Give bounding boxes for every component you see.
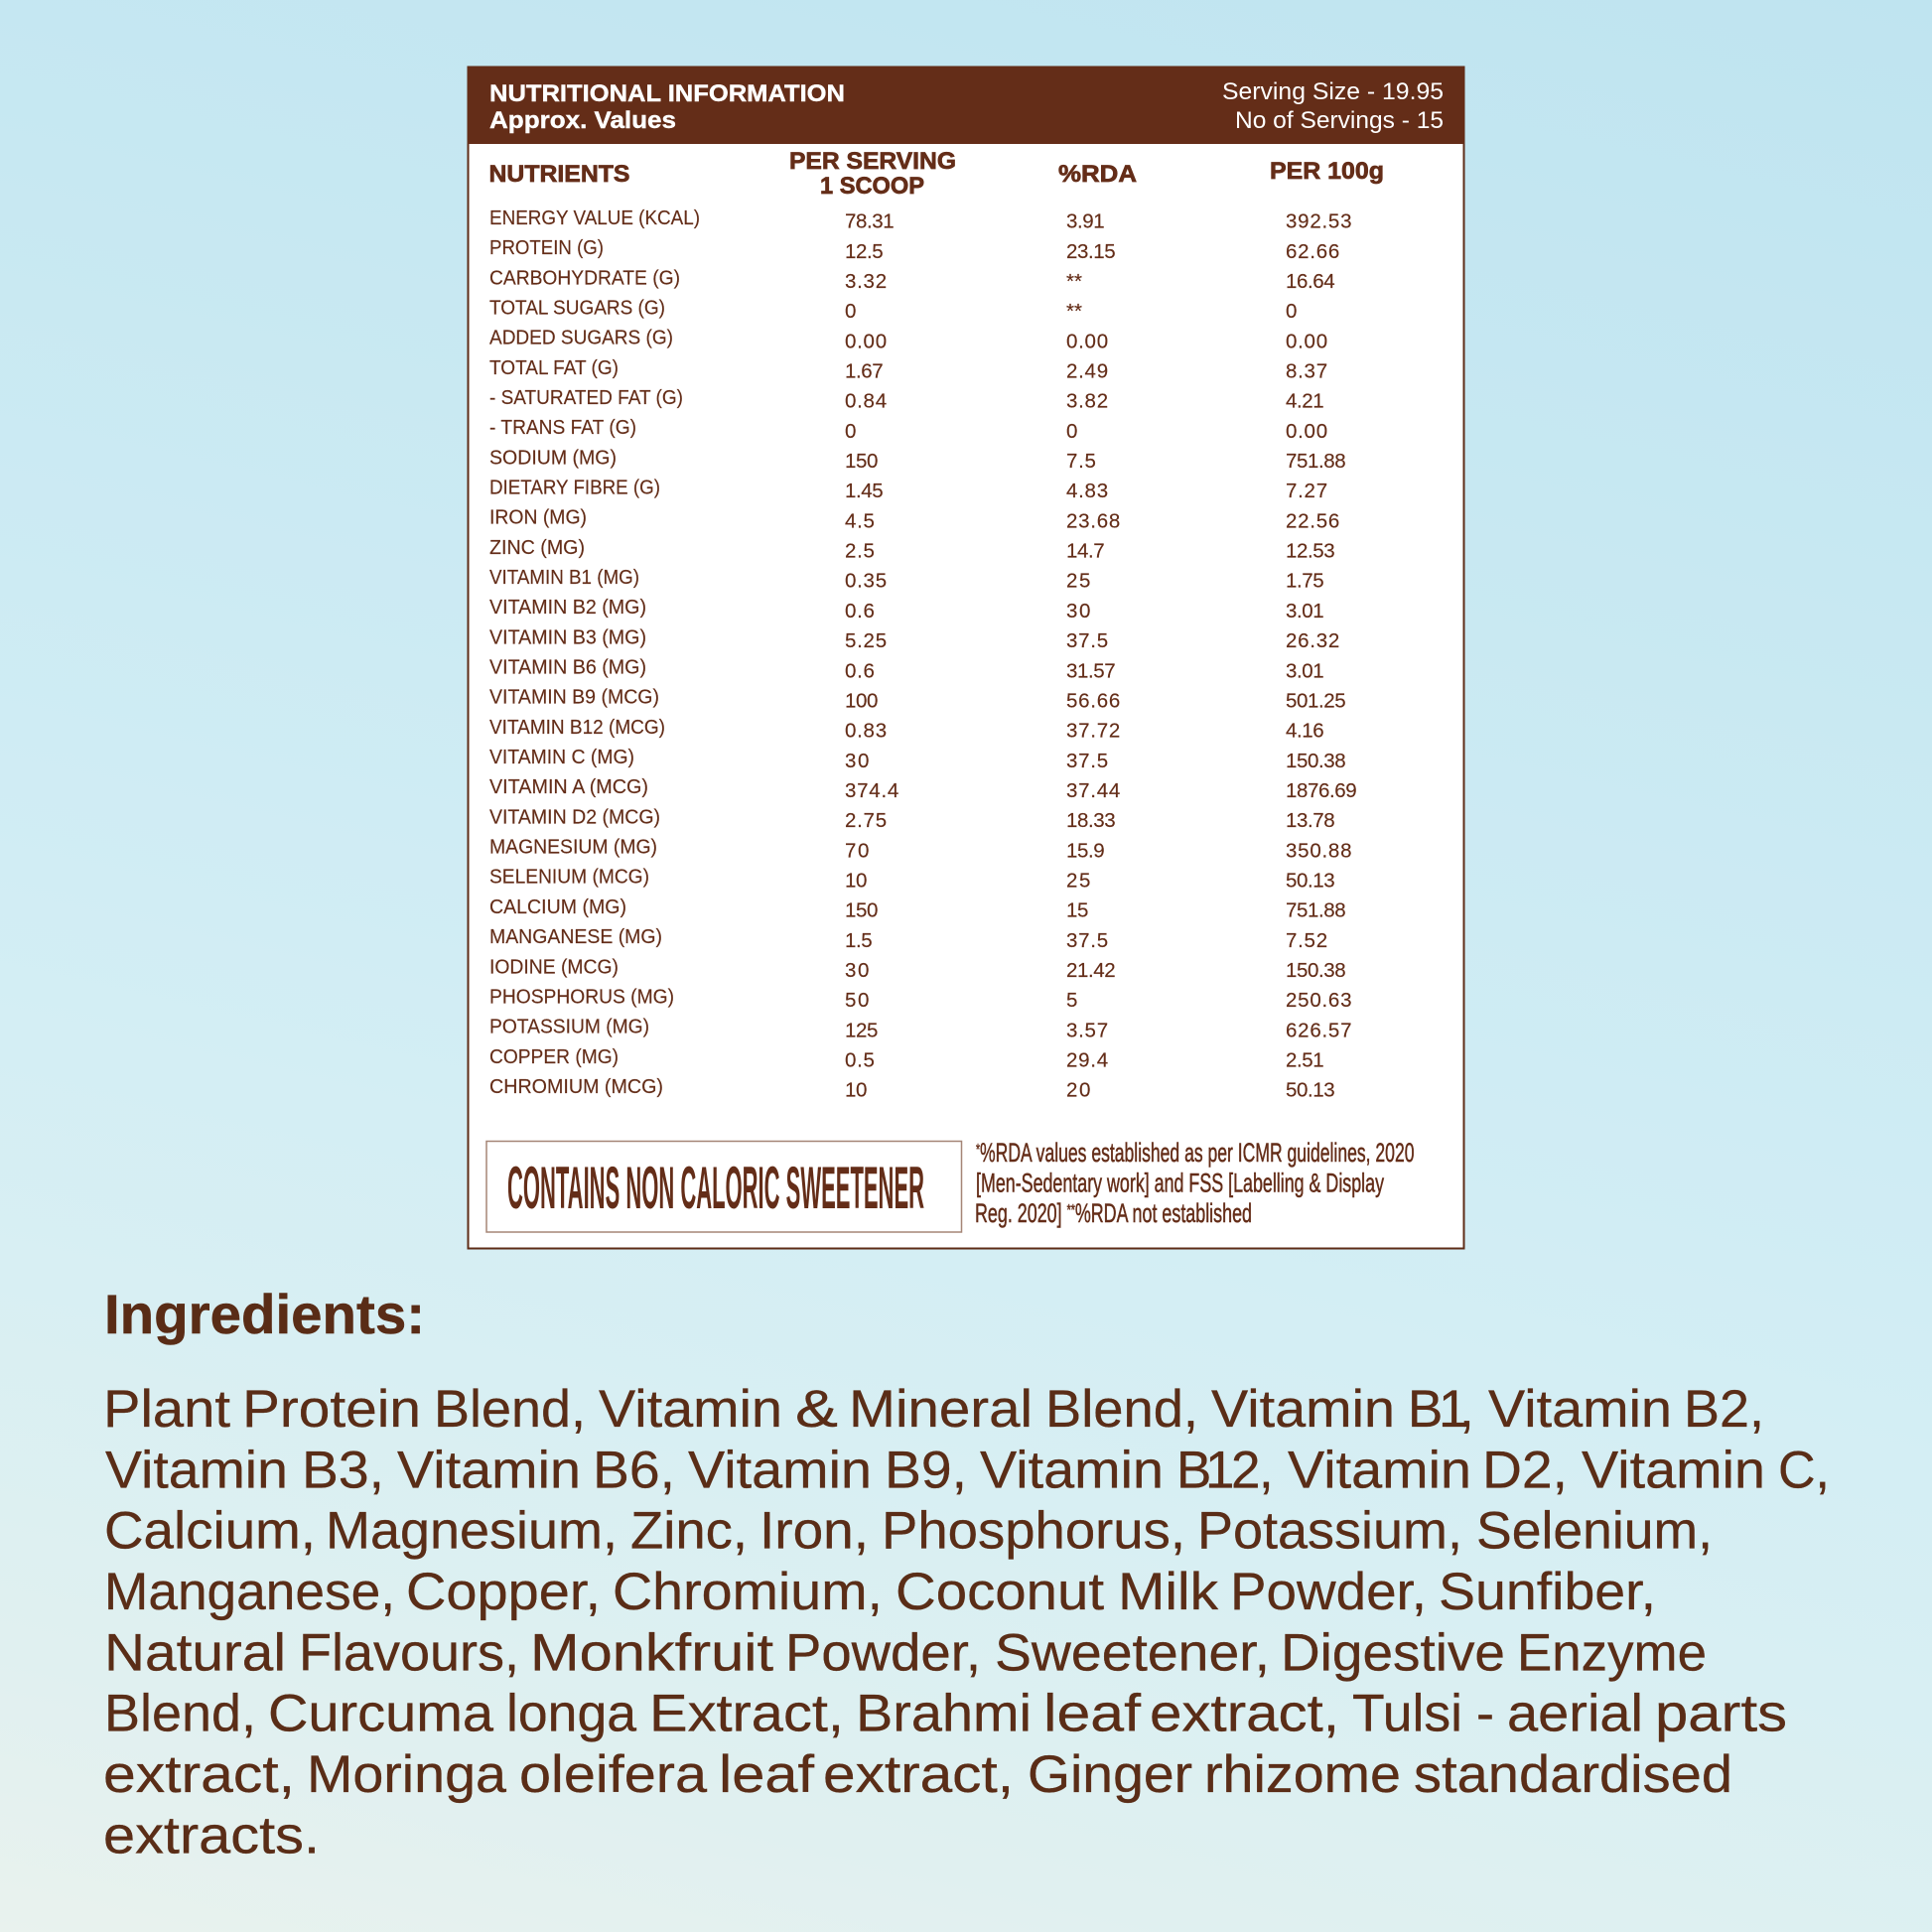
row: potassium: 626.57 xyxy=(1286,1019,1352,1041)
row: iodine: 21.42 xyxy=(1066,959,1115,982)
row: iodine: 30 xyxy=(845,959,869,982)
row: vitamin D2: 2.75 xyxy=(845,809,887,832)
text block: ingredients list: parts xyxy=(1655,1685,1787,1743)
row: energy value: ENERGY VALUE (KCAL) xyxy=(489,207,700,229)
row: total fat: 2.49 xyxy=(1066,360,1108,383)
table header band xyxy=(468,67,1464,144)
column heading: percent RDA: %RDA xyxy=(1058,161,1137,188)
text block: ingredients list: Milk xyxy=(1118,1563,1219,1621)
text block: ingredients list: B3, xyxy=(302,1441,384,1499)
row: vitamin B9: 100 xyxy=(845,689,878,712)
row: magnesium: 15.9 xyxy=(1066,839,1104,862)
row: total fat: 8.37 xyxy=(1286,360,1327,383)
row: vitamin A: 37.44 xyxy=(1066,779,1120,802)
row: zinc xyxy=(489,536,1334,563)
text block: ingredients list: Digestive xyxy=(1281,1623,1505,1682)
row: dietary fibre xyxy=(489,477,1327,502)
text block: ingredients list: Moringa xyxy=(307,1745,507,1804)
row: total sugars: TOTAL SUGARS (G) xyxy=(489,296,665,320)
row: vitamin C xyxy=(489,746,1345,772)
row: chromium: 20 xyxy=(1066,1079,1090,1102)
row: trans fat: 0.00 xyxy=(1286,420,1327,443)
row: added sugars: ADDED SUGARS (G) xyxy=(489,327,673,349)
footnote: %RDA not established xyxy=(1075,1198,1252,1228)
row: added sugars: 0.00 xyxy=(1066,330,1108,352)
row: protein: 23.15 xyxy=(1066,240,1115,263)
text block: ingredients list: Zinc, xyxy=(630,1502,748,1561)
row: magnesium: 350.88 xyxy=(1286,839,1352,862)
text block: ingredients list: Vitamin xyxy=(980,1441,1164,1499)
text block: ingredients list: leaf xyxy=(1043,1685,1141,1743)
row: copper: COPPER (MG) xyxy=(489,1045,619,1068)
text block: ingredients list: Iron, xyxy=(759,1502,869,1561)
text block: ingredients list: Brahmi xyxy=(856,1685,1032,1743)
footnote: %RDA values established as per ICMR guidelines, 2020 xyxy=(980,1138,1414,1168)
text block: ingredients list: Ginger xyxy=(1028,1745,1192,1804)
row: vitamin B9: VITAMIN B9 (MCG) xyxy=(489,686,659,709)
row: vitamin B12 xyxy=(489,716,1323,743)
text block: ingredients list: Copper, xyxy=(406,1563,601,1621)
callout: contains non caloric sweetener xyxy=(486,1142,961,1232)
row: potassium xyxy=(489,1016,1352,1041)
footnote: [Men-Sedentary work] and FSS [Labelling & Display xyxy=(976,1168,1384,1197)
row: total sugars: 0 xyxy=(845,300,856,323)
row: vitamin B2: 0.6 xyxy=(845,600,875,622)
row: vitamin B3: 26.32 xyxy=(1286,629,1339,652)
text block: ingredients list: Phosphorus, xyxy=(882,1502,1185,1561)
subheading: approx values: Approx. Values xyxy=(489,107,676,134)
row: sodium: 751.88 xyxy=(1286,450,1345,473)
row: vitamin B2 xyxy=(489,596,1323,622)
row: magnesium: 70 xyxy=(845,839,869,862)
text block: ingredients list: Flavours, xyxy=(299,1623,519,1682)
text block: ingredients list: Vitamin xyxy=(1488,1380,1672,1439)
row: carbohydrate xyxy=(489,266,1334,293)
footnote: * xyxy=(976,1142,980,1159)
row: vitamin B1 xyxy=(489,566,1323,593)
row: dietary fibre: 1.45 xyxy=(845,480,883,502)
row: vitamin B2: VITAMIN B2 (MG) xyxy=(489,596,646,619)
text block: ingredients list: rhizome xyxy=(1204,1745,1401,1804)
text block: ingredients list: Monkfruit xyxy=(530,1623,773,1682)
row: protein xyxy=(489,236,1339,263)
row: protein: PROTEIN (G) xyxy=(489,236,604,259)
text block: ingredients list: Vitamin xyxy=(688,1441,872,1499)
row: iron: IRON (MG) xyxy=(489,506,587,529)
row: phosphorus: PHOSPHORUS (MG) xyxy=(489,985,674,1008)
row: energy value: 3.91 xyxy=(1066,210,1104,233)
row: sodium xyxy=(489,446,1345,473)
row: iodine: IODINE (MCG) xyxy=(489,955,619,978)
row: vitamin B6: 0.6 xyxy=(845,659,875,682)
row: vitamin B6: 3.01 xyxy=(1286,659,1323,682)
row: carbohydrate: 3.32 xyxy=(845,270,887,293)
text block: ingredients list: Sunfiber, xyxy=(1439,1563,1656,1621)
text block: ingredients list: Vitamin xyxy=(1582,1441,1765,1499)
text block: ingredients list: - xyxy=(1476,1685,1494,1743)
row: calcium: 751.88 xyxy=(1286,899,1345,922)
text block: ingredients list xyxy=(103,1380,1830,1864)
row: selenium xyxy=(489,866,1334,892)
row: vitamin B9: 501.25 xyxy=(1286,689,1345,712)
row: vitamin B2: 30 xyxy=(1066,600,1090,622)
row: trans fat: 0 xyxy=(1066,420,1077,443)
text block: ingredients list: B2, xyxy=(1684,1380,1764,1439)
row: carbohydrate: CARBOHYDRATE (G) xyxy=(489,266,680,289)
row: vitamin B12: 4.16 xyxy=(1286,720,1323,743)
text block: ingredients list: oleifera xyxy=(519,1745,708,1804)
row: vitamin B6: 31.57 xyxy=(1066,659,1115,682)
row: vitamin A: VITAMIN A (MCG) xyxy=(489,775,648,798)
row: vitamin B2: 3.01 xyxy=(1286,600,1323,622)
row: copper: 29.4 xyxy=(1066,1048,1108,1072)
footnote: ** xyxy=(1067,1202,1075,1219)
row: manganese: 7.52 xyxy=(1286,929,1327,952)
panel: nutrition table xyxy=(468,67,1464,1249)
row: manganese: 1.5 xyxy=(845,929,872,952)
row: protein: 12.5 xyxy=(845,240,883,263)
row: manganese: 37.5 xyxy=(1066,929,1108,952)
text block: ingredients list: leaf xyxy=(719,1745,814,1804)
text block: ingredients list: Chromium, xyxy=(613,1563,883,1621)
row: saturated fat: - SATURATED FAT (G) xyxy=(489,386,683,409)
row: manganese xyxy=(489,925,1327,952)
row: sodium: 7.5 xyxy=(1066,450,1096,473)
row: chromium: 50.13 xyxy=(1286,1079,1334,1102)
text block: ingredients list: aerial xyxy=(1507,1685,1643,1743)
text block: ingredients list: Powder, xyxy=(785,1623,981,1682)
row: saturated fat: 0.84 xyxy=(845,390,887,413)
text block: ingredients list: Coconut xyxy=(896,1563,1104,1621)
row: carbohydrate: ** xyxy=(1066,270,1082,293)
row: total fat: 1.67 xyxy=(845,360,883,383)
text block: ingredients list: longa xyxy=(506,1685,637,1743)
text block: ingredients list: Natural xyxy=(104,1623,286,1682)
footnote xyxy=(975,1138,1414,1228)
serving size: Serving Size - 19.95 xyxy=(1222,78,1444,105)
text block: ingredients list: Manganese, xyxy=(104,1563,395,1621)
row: chromium: 10 xyxy=(845,1079,867,1102)
text block: ingredients list: Magnesium, xyxy=(326,1502,618,1561)
row: total sugars xyxy=(489,296,1297,323)
text block: ingredients list: extract, xyxy=(823,1745,1014,1804)
row: magnesium xyxy=(489,836,1352,862)
row: phosphorus: 250.63 xyxy=(1286,989,1352,1012)
row: selenium: 50.13 xyxy=(1286,869,1334,892)
row: total fat xyxy=(489,356,1327,383)
row: protein: 62.66 xyxy=(1286,240,1339,263)
row: iron: 22.56 xyxy=(1286,509,1339,532)
column heading: per serving: PER SERVING xyxy=(789,148,956,175)
number of servings: No of Servings - 15 xyxy=(1235,107,1444,134)
row: magnesium: MAGNESIUM (MG) xyxy=(489,836,657,859)
row: carbohydrate: 16.64 xyxy=(1286,270,1334,293)
row: saturated fat: 4.21 xyxy=(1286,390,1323,413)
row: energy value xyxy=(489,207,1352,233)
row: zinc: 2.5 xyxy=(845,540,875,563)
text block: ingredients list: B9, xyxy=(885,1441,967,1499)
row: vitamin B1: VITAMIN B1 (MG) xyxy=(489,566,639,589)
row: zinc: ZINC (MG) xyxy=(489,536,585,559)
row: dietary fibre: 7.27 xyxy=(1286,480,1327,502)
row: phosphorus: 50 xyxy=(845,989,869,1012)
row: vitamin B6 xyxy=(489,656,1323,682)
row: sodium: SODIUM (MG) xyxy=(489,446,617,469)
row: zinc: 12.53 xyxy=(1286,540,1334,563)
text block: ingredients list: Vitamin xyxy=(599,1380,782,1439)
row: iron xyxy=(489,506,1339,532)
row: vitamin B12: 37.72 xyxy=(1066,720,1120,743)
row: sodium: 150 xyxy=(845,450,878,473)
text block: ingredients list: Plant xyxy=(103,1380,230,1439)
row: calcium: 150 xyxy=(845,899,878,922)
row: added sugars: 0.00 xyxy=(1286,330,1327,352)
row: vitamin D2 xyxy=(489,805,1334,832)
row: calcium: 15 xyxy=(1066,899,1088,922)
text block: ingredients list: Vitamin xyxy=(1211,1380,1395,1439)
text block: ingredients list: Blend, xyxy=(434,1380,586,1439)
row: copper xyxy=(489,1045,1323,1072)
row: vitamin B9 xyxy=(489,686,1345,712)
row: vitamin B9: 56.66 xyxy=(1066,689,1120,712)
row: vitamin B12: 0.83 xyxy=(845,720,887,743)
text block: ingredients list: Vitamin xyxy=(1288,1441,1471,1499)
row: trans fat xyxy=(489,416,1327,443)
row: vitamin A: 1876.69 xyxy=(1286,779,1356,802)
row: vitamin B3: VITAMIN B3 (MG) xyxy=(489,625,646,648)
row: potassium: POTASSIUM (MG) xyxy=(489,1016,649,1038)
column heading: nutrients: NUTRIENTS xyxy=(488,161,629,188)
row: vitamin C: 150.38 xyxy=(1286,750,1345,772)
row: vitamin D2: 13.78 xyxy=(1286,809,1334,832)
text block: ingredients list: Extract, xyxy=(649,1685,844,1743)
row: added sugars xyxy=(489,327,1327,352)
row: vitamin B1: 0.35 xyxy=(845,570,887,593)
text block: ingredients list: C, xyxy=(1778,1441,1830,1499)
row: iron: 4.5 xyxy=(845,509,875,532)
row: zinc: 14.7 xyxy=(1066,540,1104,563)
row: calcium: CALCIUM (MG) xyxy=(489,896,626,918)
row: potassium: 3.57 xyxy=(1066,1019,1108,1041)
row: calcium xyxy=(489,896,1345,922)
row: chromium: CHROMIUM (MCG) xyxy=(489,1075,663,1098)
text block: ingredients list: Mineral xyxy=(849,1380,1033,1439)
row: selenium: 10 xyxy=(845,869,867,892)
row: added sugars: 0.00 xyxy=(845,330,887,352)
row: phosphorus xyxy=(489,985,1352,1012)
text block: ingredients list: Enzyme xyxy=(1517,1623,1707,1682)
row: saturated fat: 3.82 xyxy=(1066,390,1108,413)
row: vitamin B3 xyxy=(489,625,1339,652)
row: energy value: 392.53 xyxy=(1286,210,1352,233)
row: vitamin D2: 18.33 xyxy=(1066,809,1115,832)
row: vitamin B1: 1.75 xyxy=(1286,570,1323,593)
row: chromium xyxy=(489,1075,1334,1102)
text block: ingredients list: extract, xyxy=(103,1745,295,1804)
column heading: per 100g: PER 100g xyxy=(1270,158,1384,185)
text block: ingredients list: Selenium, xyxy=(1476,1502,1713,1561)
text block: ingredients list: Powder, xyxy=(1230,1563,1427,1621)
row: saturated fat xyxy=(489,386,1323,413)
row: phosphorus: 5 xyxy=(1066,989,1077,1012)
row: vitamin B1: 25 xyxy=(1066,570,1090,593)
text block: ingredients list: D2, xyxy=(1482,1441,1568,1499)
row: iodine xyxy=(489,955,1345,982)
row: iron: 23.68 xyxy=(1066,509,1120,532)
text block: ingredients list: Calcium, xyxy=(104,1502,316,1561)
row: copper: 2.51 xyxy=(1286,1048,1323,1072)
text block: ingredients list: Curcuma xyxy=(268,1685,494,1743)
text block: ingredients list: Blend, xyxy=(104,1685,256,1743)
row: selenium: 25 xyxy=(1066,869,1090,892)
column heading: per serving: 1 SCOOP xyxy=(820,173,924,200)
text block: ingredients list: Tulsi xyxy=(1352,1685,1462,1743)
text block: ingredients list: B6, xyxy=(593,1441,675,1499)
row: energy value: 78.31 xyxy=(845,210,894,233)
row: potassium: 125 xyxy=(845,1019,878,1041)
heading: nutritional information: NUTRITIONAL INFORMATION xyxy=(489,80,845,107)
text block: ingredients list: Vitamin xyxy=(105,1441,288,1499)
row: iodine: 150.38 xyxy=(1286,959,1345,982)
row: total fat: TOTAL FAT (G) xyxy=(489,356,619,379)
row: vitamin A: 374.4 xyxy=(845,779,898,802)
row: vitamin C: VITAMIN C (MG) xyxy=(489,746,634,768)
row: vitamin A xyxy=(489,775,1356,802)
row: manganese: MANGANESE (MG) xyxy=(489,925,662,948)
row: selenium: SELENIUM (MCG) xyxy=(489,866,649,889)
row: trans fat: 0 xyxy=(845,420,856,443)
row: trans fat: - TRANS FAT (G) xyxy=(489,416,636,439)
text block: ingredients list: Blend, xyxy=(1045,1380,1198,1439)
row: vitamin B12: VITAMIN B12 (MCG) xyxy=(489,716,665,739)
row: total sugars: 0 xyxy=(1286,300,1297,323)
text block: ingredients list: extract, xyxy=(1150,1685,1339,1743)
text block: ingredients list: Vitamin xyxy=(397,1441,581,1499)
text block: ingredients list: B1, xyxy=(1408,1380,1474,1439)
text block: ingredients list: Sweetener, xyxy=(995,1623,1270,1682)
text block: ingredients list: Protein xyxy=(242,1380,421,1439)
heading: ingredients: Ingredients: xyxy=(104,1283,425,1345)
text block: ingredients list: B12, xyxy=(1176,1441,1274,1499)
row: vitamin B3: 37.5 xyxy=(1066,629,1108,652)
row: dietary fibre: 4.83 xyxy=(1066,480,1108,502)
column heading: per serving xyxy=(789,148,956,200)
text block: ingredients list: extracts. xyxy=(103,1806,320,1864)
text block: ingredients list: Potassium, xyxy=(1197,1502,1462,1561)
row: copper: 0.5 xyxy=(845,1048,875,1072)
text block: ingredients list: & xyxy=(795,1380,838,1439)
row: vitamin B6: VITAMIN B6 (MG) xyxy=(489,656,646,679)
row: total sugars: ** xyxy=(1066,300,1082,323)
text block: ingredients list: standardised xyxy=(1414,1745,1732,1804)
footnote: Reg. 2020] xyxy=(975,1198,1106,1228)
row: vitamin D2: VITAMIN D2 (MCG) xyxy=(489,805,660,828)
row: dietary fibre: DIETARY FIBRE (G) xyxy=(489,477,660,498)
row: vitamin C: 30 xyxy=(845,750,869,772)
panel: nutrition table: CONTAINS NON CALORIC SWEETENER xyxy=(507,1155,924,1221)
row: vitamin C: 37.5 xyxy=(1066,750,1108,772)
row: vitamin B3: 5.25 xyxy=(845,629,887,652)
